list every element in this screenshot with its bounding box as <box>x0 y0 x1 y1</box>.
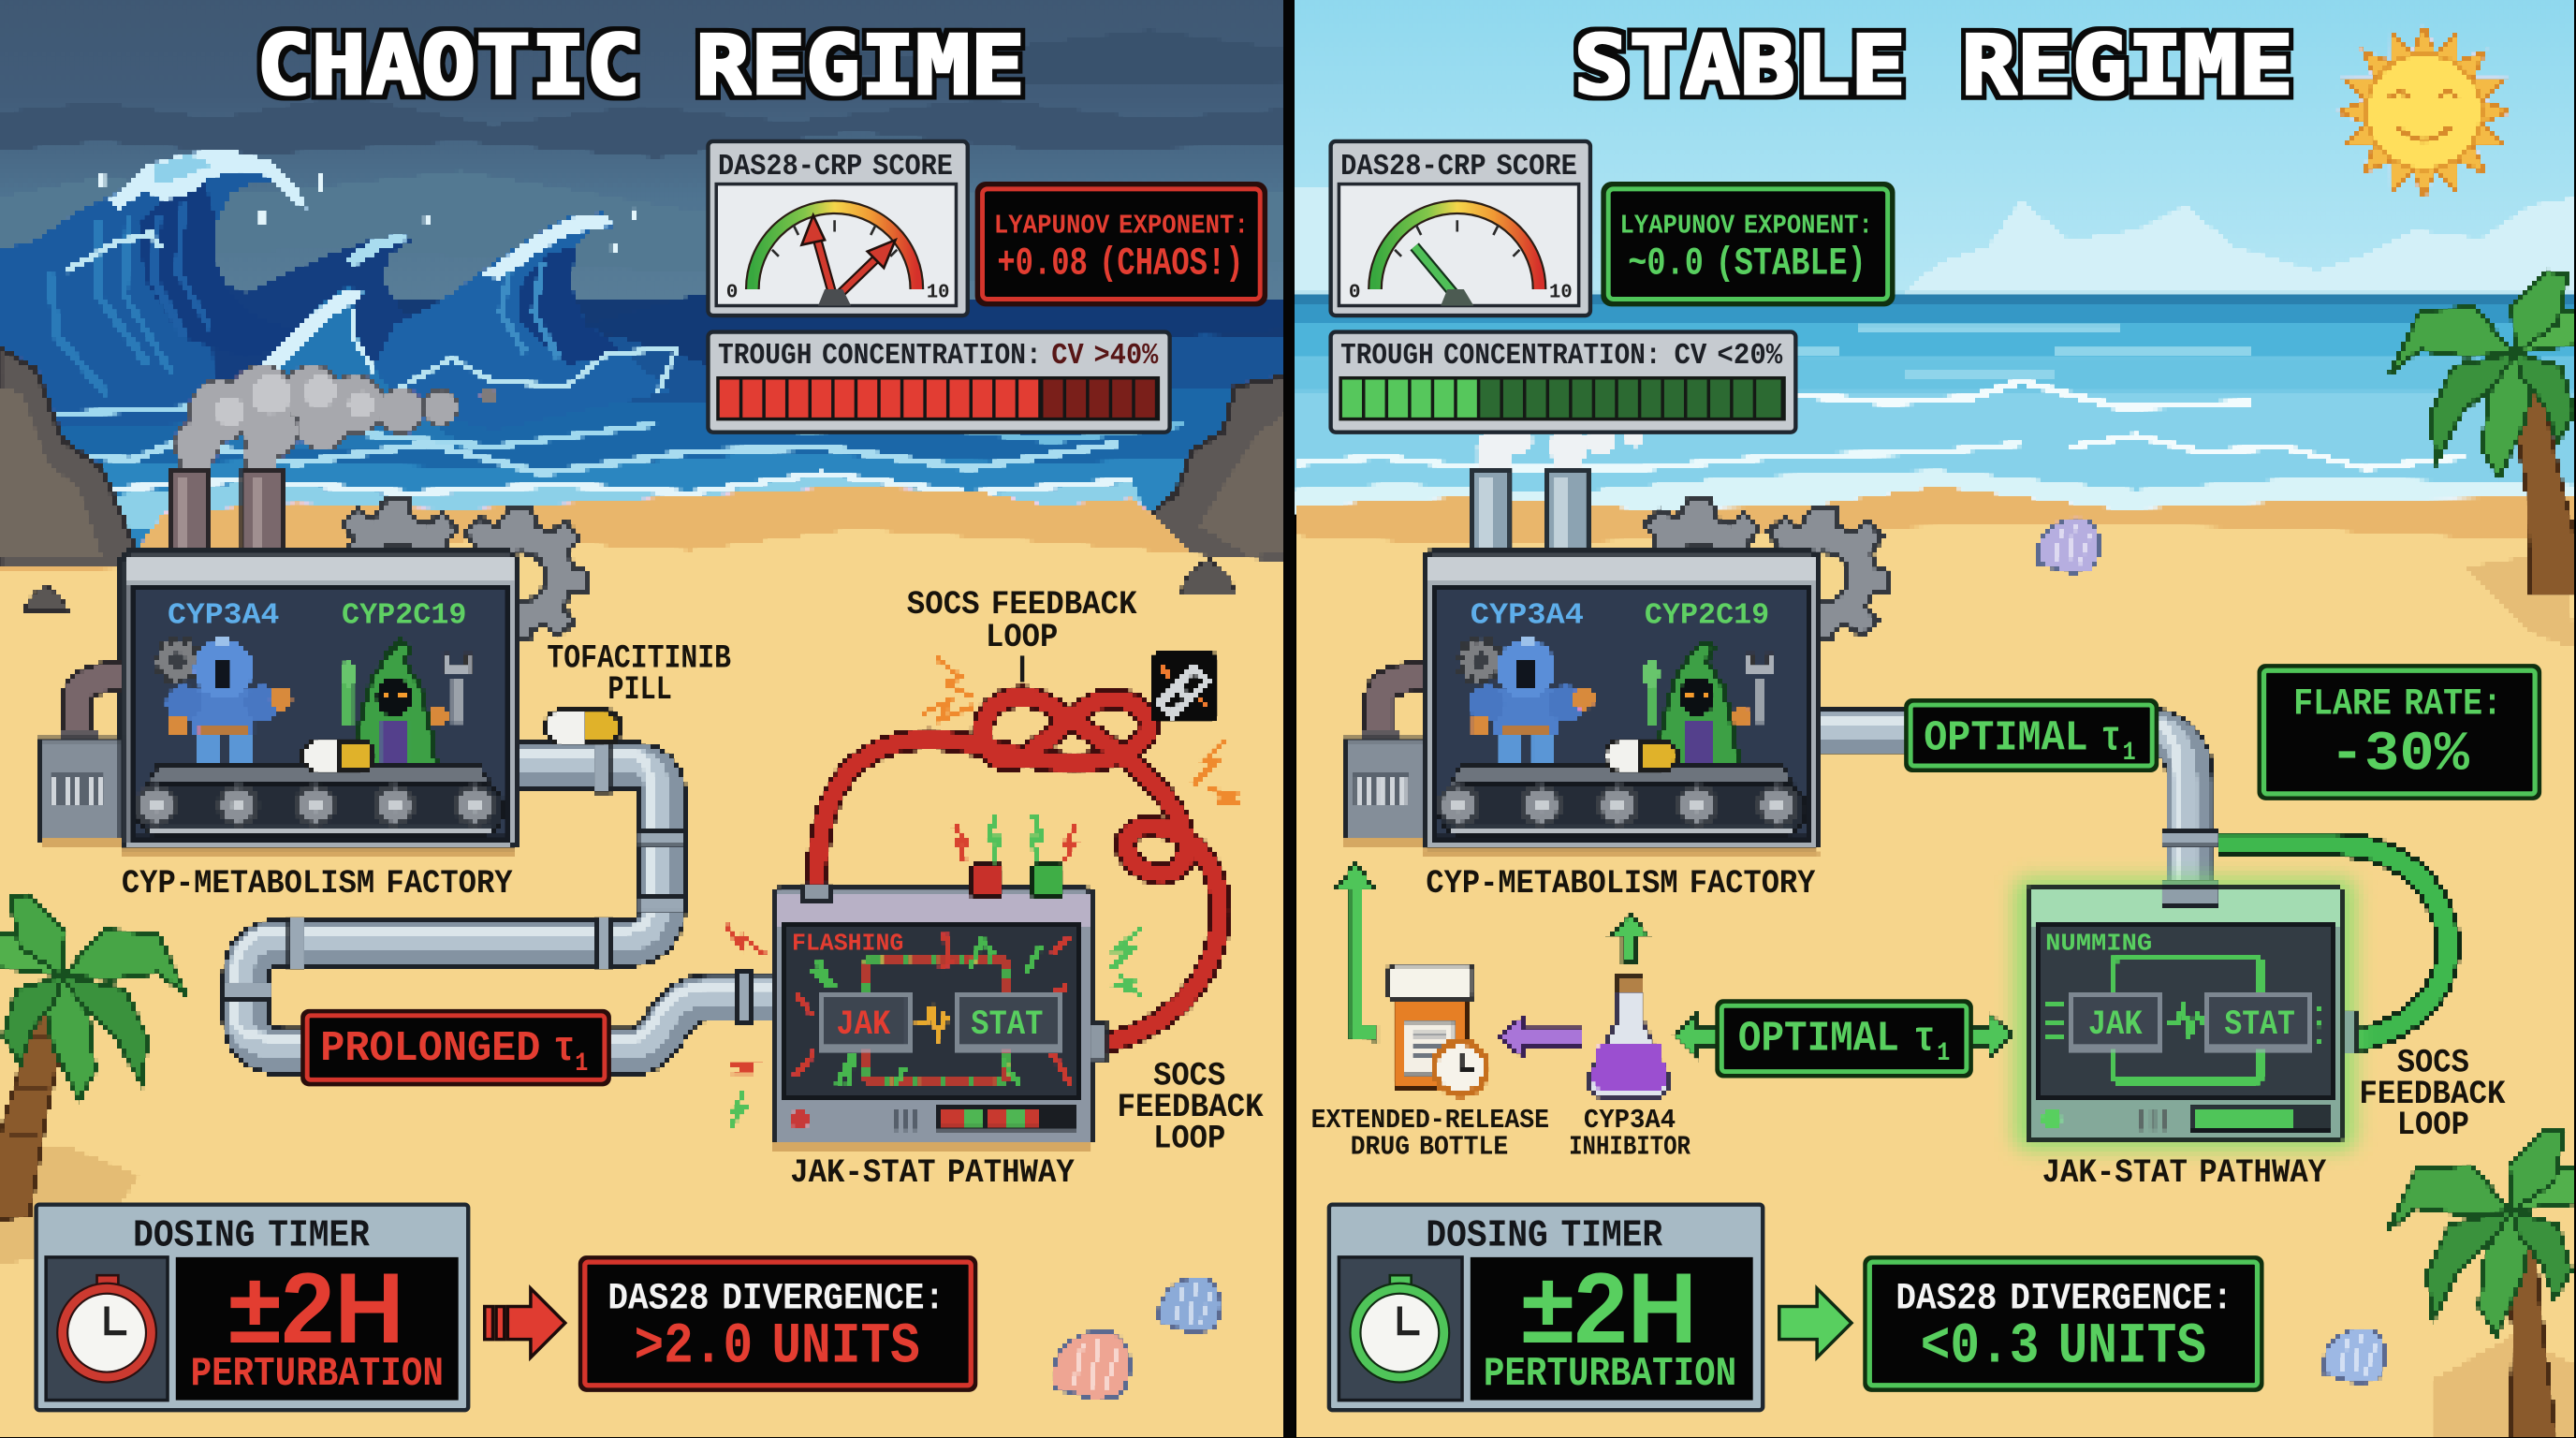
panel: DAS28-CRP gauge stable <box>1331 141 1590 315</box>
arrow: timer to divergence stable <box>1779 1288 1852 1357</box>
label: SOCS feedback loop side: SOCS <box>2397 1045 2469 1082</box>
callout: flare rate <box>2261 668 2539 797</box>
panel: dosing timer chaotic <box>37 1205 468 1410</box>
main wave <box>0 150 509 431</box>
label: CYP3A4 stable: CYP3A4 <box>1471 599 1584 632</box>
factory body with workers <box>1344 552 1819 858</box>
callout: prolonged tau: 1 <box>575 1049 588 1078</box>
icon: gears <box>332 500 587 639</box>
bar <box>1339 376 1786 420</box>
icon: palm tree lower right <box>2387 1129 2576 1438</box>
icon: extended-release drug bottle <box>1388 964 1486 1094</box>
title: stable regime: STABLE REGIME <box>1573 18 2293 113</box>
background: stormy sky <box>0 0 1288 329</box>
label: TROUGH CONCENTRATION: <box>718 340 1042 373</box>
heading: DOSING TIMER <box>133 1215 371 1258</box>
background: calm sea <box>1288 292 2576 513</box>
label: DAS28-CRP SCORE <box>718 151 953 183</box>
label: LYAPUNOV EXPONENT: <box>1620 210 1873 241</box>
JAK-STAT machine calm <box>2014 877 2358 1151</box>
label: STAT: STAT <box>971 1005 1043 1045</box>
panel: DAS28 divergence chaotic <box>581 1259 974 1388</box>
icon: pill on conveyor <box>302 740 374 772</box>
callout: optimal tau upper: τ <box>2101 713 2121 762</box>
value: ±2H <box>228 1252 404 1364</box>
label: JAK: JAK <box>2088 1005 2143 1045</box>
callout: flare rate: FLARE RATE: <box>2293 683 2502 726</box>
label: SOCS feedback loop side: LOOP <box>2397 1107 2469 1144</box>
label: SOCS feedback loop side <box>2359 1045 2506 1144</box>
icon: broken chain link <box>1150 653 1219 723</box>
icon: palm tree left <box>0 894 187 1220</box>
smokestacks <box>1466 470 1593 572</box>
label: CYP3A4 inhibitor <box>1569 1105 1691 1162</box>
icon: stopwatch <box>63 1275 151 1377</box>
centre divider <box>1283 0 1295 1438</box>
label: SOCS feedback loop top <box>907 586 1137 682</box>
heading: DOSING TIMER <box>1426 1215 1663 1258</box>
background: clear sky <box>1288 0 2576 296</box>
label: extended-release drug bottle: EXTENDED-RELEASE <box>1311 1105 1549 1136</box>
panel: trough concentration stable <box>1331 332 1795 433</box>
sparks <box>726 657 1240 1125</box>
icon: gears <box>1634 500 1889 639</box>
caption: PERTURBATION <box>1484 1351 1736 1398</box>
smoke plume <box>176 366 496 474</box>
label: factory: CYP-METABOLISM FACTORY <box>1426 865 1815 902</box>
caption: PERTURBATION <box>191 1351 444 1398</box>
panel: Lyapunov exponent chaotic <box>979 185 1264 302</box>
label: DAS28 DIVERGENCE: <box>607 1277 944 1319</box>
value: CV <20% <box>1674 340 1782 373</box>
label: extended-release drug bottle <box>1311 1105 1549 1162</box>
background: stormy sea <box>0 150 1288 572</box>
icon: pill on conveyor <box>1605 740 1677 772</box>
callout: optimal tau lower: 1 <box>1937 1039 1950 1068</box>
callout: optimal tau upper <box>1908 702 2156 770</box>
green and purple arrows <box>1336 863 2012 1058</box>
panel: chaotic regime scene artwork <box>0 0 1288 1438</box>
label: CYP2C19 chaotic: CYP2C19 <box>342 599 466 632</box>
rear wave <box>211 233 493 381</box>
bar <box>716 376 1160 420</box>
panel: DAS28 divergence stable <box>1866 1259 2261 1388</box>
callout: prolonged tau <box>304 1012 607 1083</box>
label: tofacitinib pill <box>547 640 731 709</box>
label: tofacitinib pill: TOFACITINIB <box>547 640 731 678</box>
value: ~0.0 (STABLE) <box>1628 241 1866 286</box>
label: SOCS feedback loop side: FEEDBACK <box>1117 1089 1265 1126</box>
green feedback loop <box>2217 844 2448 1042</box>
red tangled feedback loop <box>816 697 1220 1044</box>
pipe: factory to JAK-STAT <box>1815 720 2217 903</box>
title: chaotic regime: CHAOTIC REGIME <box>256 18 1025 113</box>
label: TROUGH CONCENTRATION: <box>1340 340 1661 373</box>
callout: optimal tau lower: OPTIMAL <box>1738 1015 1899 1064</box>
callout: optimal tau lower <box>1719 1003 1969 1075</box>
smokestacks <box>163 470 289 572</box>
label: LYAPUNOV EXPONENT: <box>994 210 1249 241</box>
label: CYP3A4 inhibitor: INHIBITOR <box>1569 1131 1691 1162</box>
callout: prolonged tau: τ <box>553 1024 575 1073</box>
icon: seashells <box>2038 519 2385 1384</box>
label: DAS28-CRP SCORE <box>1340 151 1577 183</box>
scale marks: 0 <box>1349 282 1361 304</box>
label: SOCS feedback loop side: SOCS <box>1153 1058 1225 1095</box>
panel: trough concentration chaotic <box>708 332 1170 433</box>
label: CYP3A4 chaotic: CYP3A4 <box>168 599 279 632</box>
background: rocks <box>0 348 1288 567</box>
white steam <box>1477 426 1645 474</box>
pipe: factory to JAK-STAT <box>222 740 775 1051</box>
value: CV >40% <box>1051 340 1158 373</box>
label: numming: NUMMING <box>2045 930 2152 958</box>
background: sand <box>0 487 1288 1438</box>
icon: smiling sun <box>2338 26 2510 198</box>
label: SOCS feedback loop top: LOOP <box>986 619 1058 656</box>
callout: optimal tau lower: τ <box>1914 1015 1936 1064</box>
label: CYP3A4 inhibitor: CYP3A4 <box>1584 1105 1676 1136</box>
value: <0.3 UNITS <box>1921 1314 2206 1379</box>
icon: seashells <box>1053 1278 1221 1401</box>
label: JAK: JAK <box>836 1005 891 1045</box>
panel: DAS28-CRP gauge chaotic <box>708 141 968 315</box>
label: extended-release drug bottle: DRUG BOTTLE <box>1351 1131 1508 1162</box>
label: CYP2C19 stable: CYP2C19 <box>1645 599 1769 632</box>
scale marks: 0 <box>726 282 738 304</box>
callout: prolonged tau: PROLONGED <box>320 1024 540 1073</box>
label: STAT: STAT <box>2224 1005 2295 1045</box>
panel: DAS28-CRP gauge chaotic: 10 <box>927 282 949 304</box>
panel: DAS28-CRP gauge stable: 10 <box>1549 282 1573 304</box>
callout: optimal tau upper: 1 <box>2123 739 2136 768</box>
label: SOCS feedback loop top: SOCS FEEDBACK <box>907 586 1137 624</box>
callout: optimal tau upper: OPTIMAL <box>1924 713 2088 762</box>
label: flashing: FLASHING <box>792 930 903 958</box>
icon: CYP3A4 inhibitor flask <box>1588 976 1669 1098</box>
factory body with workers <box>41 552 516 858</box>
value: >2.0 UNITS <box>634 1314 920 1379</box>
label: SOCS feedback loop side: LOOP <box>1153 1120 1225 1157</box>
icon: stopwatch <box>1355 1275 1444 1377</box>
background: sand <box>1295 487 2576 1438</box>
label: SOCS feedback loop side <box>1117 1058 1265 1157</box>
panel: Lyapunov exponent stable <box>1605 185 1891 302</box>
panel: dosing timer stable <box>1329 1205 1763 1410</box>
label: JAK-STAT pathway: JAK-STAT PATHWAY <box>790 1154 1075 1192</box>
label: SOCS feedback loop side: FEEDBACK <box>2359 1076 2506 1113</box>
label: factory: CYP-METABOLISM FACTORY <box>122 865 513 902</box>
label: tofacitinib pill: PILL <box>607 671 672 709</box>
value: +0.08 (CHAOS!) <box>997 241 1244 286</box>
callout: flare rate: -30% <box>2330 723 2469 786</box>
JAK-STAT machine chaotic <box>774 864 1105 1151</box>
label: DAS28 DIVERGENCE: <box>1895 1277 2232 1319</box>
arrow: timer to divergence chaotic <box>485 1288 565 1357</box>
icon: pill on pipe <box>546 710 621 744</box>
foam crests <box>109 150 307 211</box>
icon: palm tree upper right <box>2391 271 2576 594</box>
panel: stable regime scene artwork <box>1288 0 2576 1438</box>
value: ±2H <box>1521 1252 1697 1364</box>
label: JAK-STAT pathway: JAK-STAT PATHWAY <box>2042 1154 2326 1192</box>
